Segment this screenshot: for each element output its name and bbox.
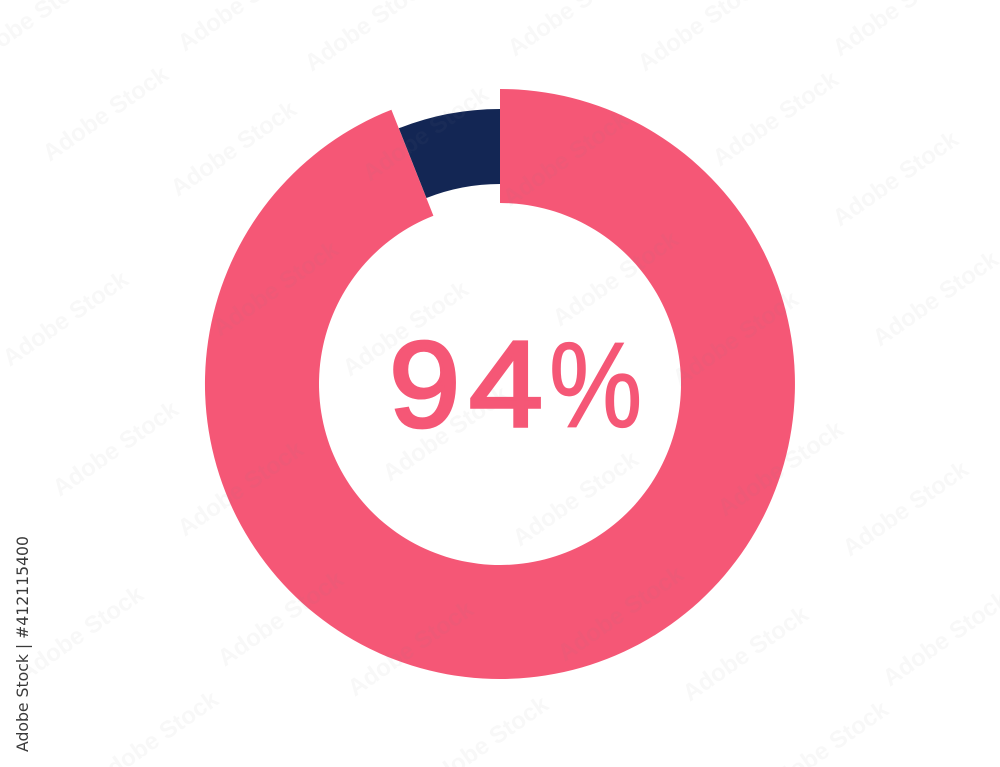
watermark pattern: Adobe Stock [668,285,804,392]
pink 94 percent segment [205,89,795,679]
watermark pattern: Adobe Stock [38,60,174,167]
percentage label: % [549,318,642,454]
watermark pattern: Adobe Stock [713,415,849,522]
stock id vertical label: Adobe Stock | #412115400 [13,536,32,752]
watermark pattern: Adobe Stock [678,600,814,707]
watermark pattern: Adobe Stock [838,455,974,562]
watermark pattern: Adobe Stock [508,445,644,552]
watermark pattern: Adobe Stock [358,80,494,187]
watermark pattern: Adobe Stock [553,560,689,667]
watermark pattern: Adobe Stock [0,265,134,372]
watermark pattern: Adobe Stock [498,105,634,212]
watermark pattern: Adobe Stock [213,565,349,672]
watermark pattern: Adobe Stock [173,435,309,542]
watermark pattern: Adobe Stock [166,95,302,202]
percentage label [389,316,642,454]
watermark pattern: Adobe Stock [708,65,844,172]
percentage label: 9 [389,316,460,453]
watermark pattern: Adobe Stock [868,245,1000,352]
watermark pattern: Adobe Stock [343,595,479,702]
watermark pattern: Adobe Stock [338,275,474,382]
watermark pattern: Adobe Stock [13,580,149,687]
navy remaining 6 percent segment [399,109,500,198]
watermark pattern: Adobe Stock [828,125,964,232]
watermark pattern: Adobe Stock [378,380,514,487]
percentage label: 4 [469,316,543,453]
watermark pattern: Adobe Stock [48,395,184,502]
donut chart: 94 percent [205,89,795,679]
watermark pattern: Adobe Stock [548,225,684,332]
watermark pattern: Adobe Stock [208,235,344,342]
